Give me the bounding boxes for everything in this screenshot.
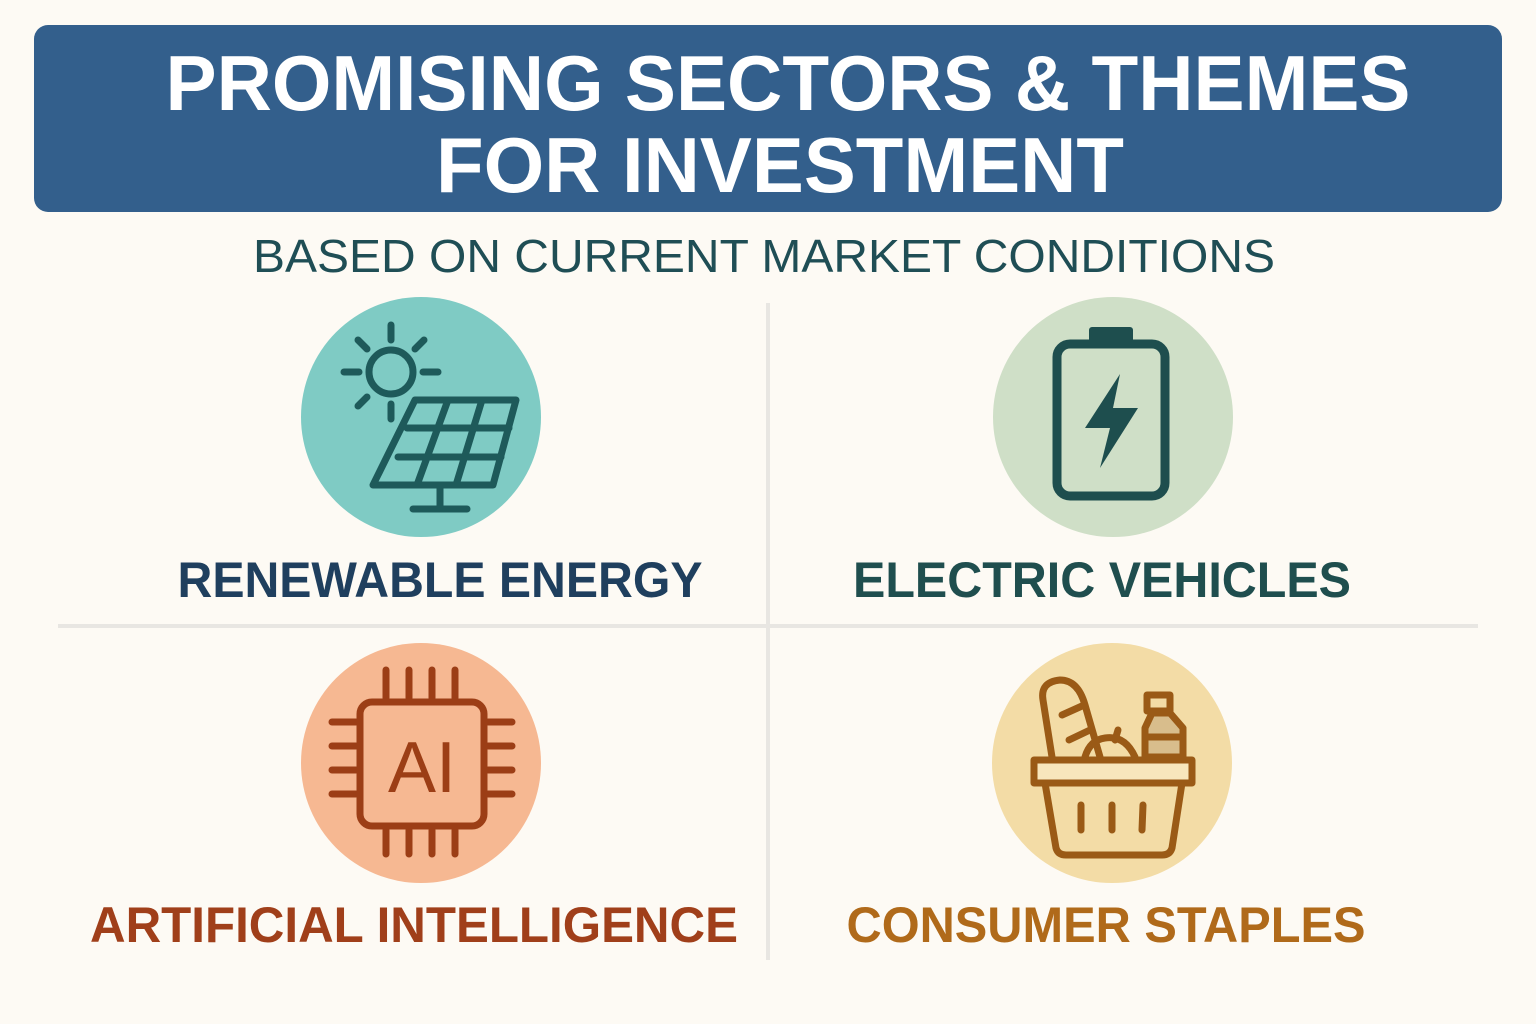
title banner — [34, 25, 1502, 212]
label: RENEWABLE ENERGY — [178, 552, 702, 608]
panel: artificial intelligence — [90, 643, 738, 953]
label: CONSUMER STAPLES — [846, 897, 1366, 953]
icon: battery — [993, 297, 1233, 537]
icon: solar panel — [301, 297, 541, 537]
label: ARTIFICIAL INTELLIGENCE — [90, 897, 738, 953]
panel: consumer staples — [846, 643, 1366, 953]
panel: renewable energy — [178, 297, 702, 608]
icon: grocery basket — [992, 643, 1232, 883]
title banner: FOR INVESTMENT — [436, 121, 1124, 209]
panel: electric vehicles — [853, 297, 1351, 608]
subtitle: BASED ON CURRENT MARKET CONDITIONS — [253, 230, 1275, 282]
title banner: PROMISING SECTORS & THEMES — [166, 39, 1410, 127]
icon: AI chip: AI — [388, 728, 456, 808]
label: ELECTRIC VEHICLES — [853, 552, 1351, 608]
icon: AI chip — [301, 643, 541, 883]
